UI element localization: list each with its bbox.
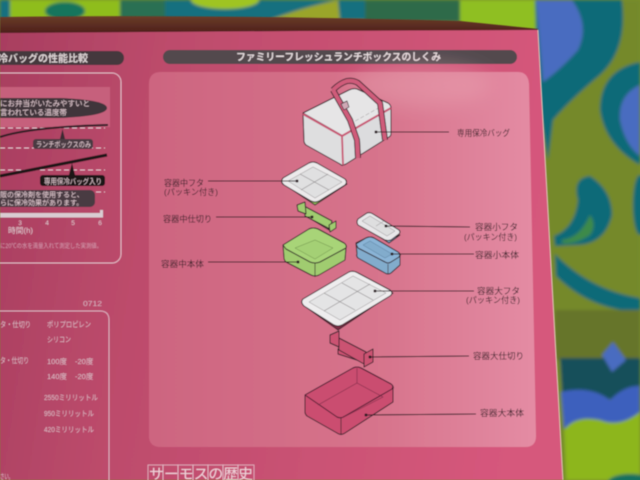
icon: small lid <box>357 213 400 243</box>
panel: specification table: 2550ミリリットル <box>44 393 98 402</box>
panel: specification table: 420ミリリットル <box>44 425 94 434</box>
callout: spoilage temperature zone: にお弁当がいたみやすいと <box>0 98 90 108</box>
label: medium divider <box>163 214 314 224</box>
callout: ice pack note <box>0 190 95 207</box>
label: large box <box>364 408 525 418</box>
chart x axis: 4 <box>45 220 49 227</box>
label: medium box: 容器中本体 <box>161 259 204 269</box>
heading: left section <box>0 51 124 65</box>
icon: large box <box>305 367 393 435</box>
line: lunch box only <box>0 125 108 137</box>
panel: specification table: 100度 <box>47 356 68 366</box>
label: large divider <box>368 351 524 361</box>
panel: performance comparison chart <box>0 73 121 263</box>
label: medium lid: (パッキン付き) <box>164 187 218 197</box>
panel: specification table: -20度 <box>75 371 94 381</box>
strap: bag handle <box>333 81 385 158</box>
panel: exploded diagram <box>149 72 536 447</box>
line: with cooler bag <box>0 155 107 176</box>
panel: specification table: ポリプロピレン <box>47 320 91 329</box>
heading: left section: 冷バッグの性能比較 <box>0 52 88 65</box>
chart x axis: 5 <box>71 220 75 227</box>
label: large box: 容器大本体 <box>480 408 525 418</box>
label: medium lid: 容器中フタ <box>164 178 204 188</box>
chart x axis: 時間(h) <box>8 226 34 235</box>
panel: specification table: -20度 <box>75 356 94 366</box>
panel: specification table: 140度 <box>47 371 68 381</box>
label: cooler bag: 専用保冷バッグ <box>457 128 510 138</box>
callout: ice pack note: 販の保冷剤を使用すると、 <box>0 190 84 199</box>
icon: medium lid <box>282 162 347 205</box>
icon: large lid <box>302 271 393 330</box>
icon: cooler bag <box>303 81 391 165</box>
heading: how it works: ファミリーフレッシュランチボックスのしくみ <box>236 52 441 64</box>
chart footnote: に20℃の水を満量入れて測定した実測値。 <box>0 242 102 250</box>
label: small lid <box>384 222 518 242</box>
panel: specification table: タ・仕切り <box>0 319 31 329</box>
label: large lid: (パッキン付き) <box>466 295 520 305</box>
callout: spoilage temperature zone <box>0 98 107 118</box>
heading: how it works <box>163 50 517 64</box>
chart temperature band <box>0 87 110 127</box>
label: large lid: 容器大フタ <box>477 286 520 296</box>
panel: specification table <box>0 311 109 480</box>
chart x axis <box>0 210 103 235</box>
label: lunch box only <box>33 129 93 149</box>
chart x axis: 3 <box>18 220 22 227</box>
callout: spoilage temperature zone: 言われている温度帯 <box>0 107 67 117</box>
icon: medium box <box>283 228 346 277</box>
label: small box: 容器小本体 <box>475 250 520 260</box>
label: medium box <box>161 259 300 269</box>
box top edge <box>0 16 538 33</box>
label: cooler bag <box>374 128 510 138</box>
chart x axis: 6 <box>98 220 102 227</box>
icon: large divider <box>330 331 373 367</box>
label: small lid: 容器小フタ <box>475 222 518 232</box>
label: small box <box>390 250 520 260</box>
panel: specification table: 950ミリリットル <box>44 409 94 418</box>
product code: 0712 <box>83 301 102 308</box>
panel: specification table: タ・仕切り <box>0 355 29 365</box>
icon: small box <box>356 237 400 274</box>
label: small lid: (パッキン付き) <box>464 232 517 242</box>
panel: specification table: シリコン <box>47 335 71 344</box>
label: large lid <box>374 286 520 305</box>
label: with cooler bag <box>40 163 105 186</box>
label: large divider: 容器大仕切り <box>473 351 524 361</box>
label: medium lid <box>164 178 298 197</box>
label: with cooler bag: 専用保冷バッグ入り <box>44 176 102 186</box>
chart dashed gridlines <box>0 128 105 192</box>
label: lunch box only: ランチボックスのみ <box>36 140 91 149</box>
label: medium divider: 容器中仕切り <box>163 214 212 224</box>
icon: medium divider <box>297 202 336 232</box>
callout: ice pack note: らに保冷効果があります。 <box>0 198 83 207</box>
